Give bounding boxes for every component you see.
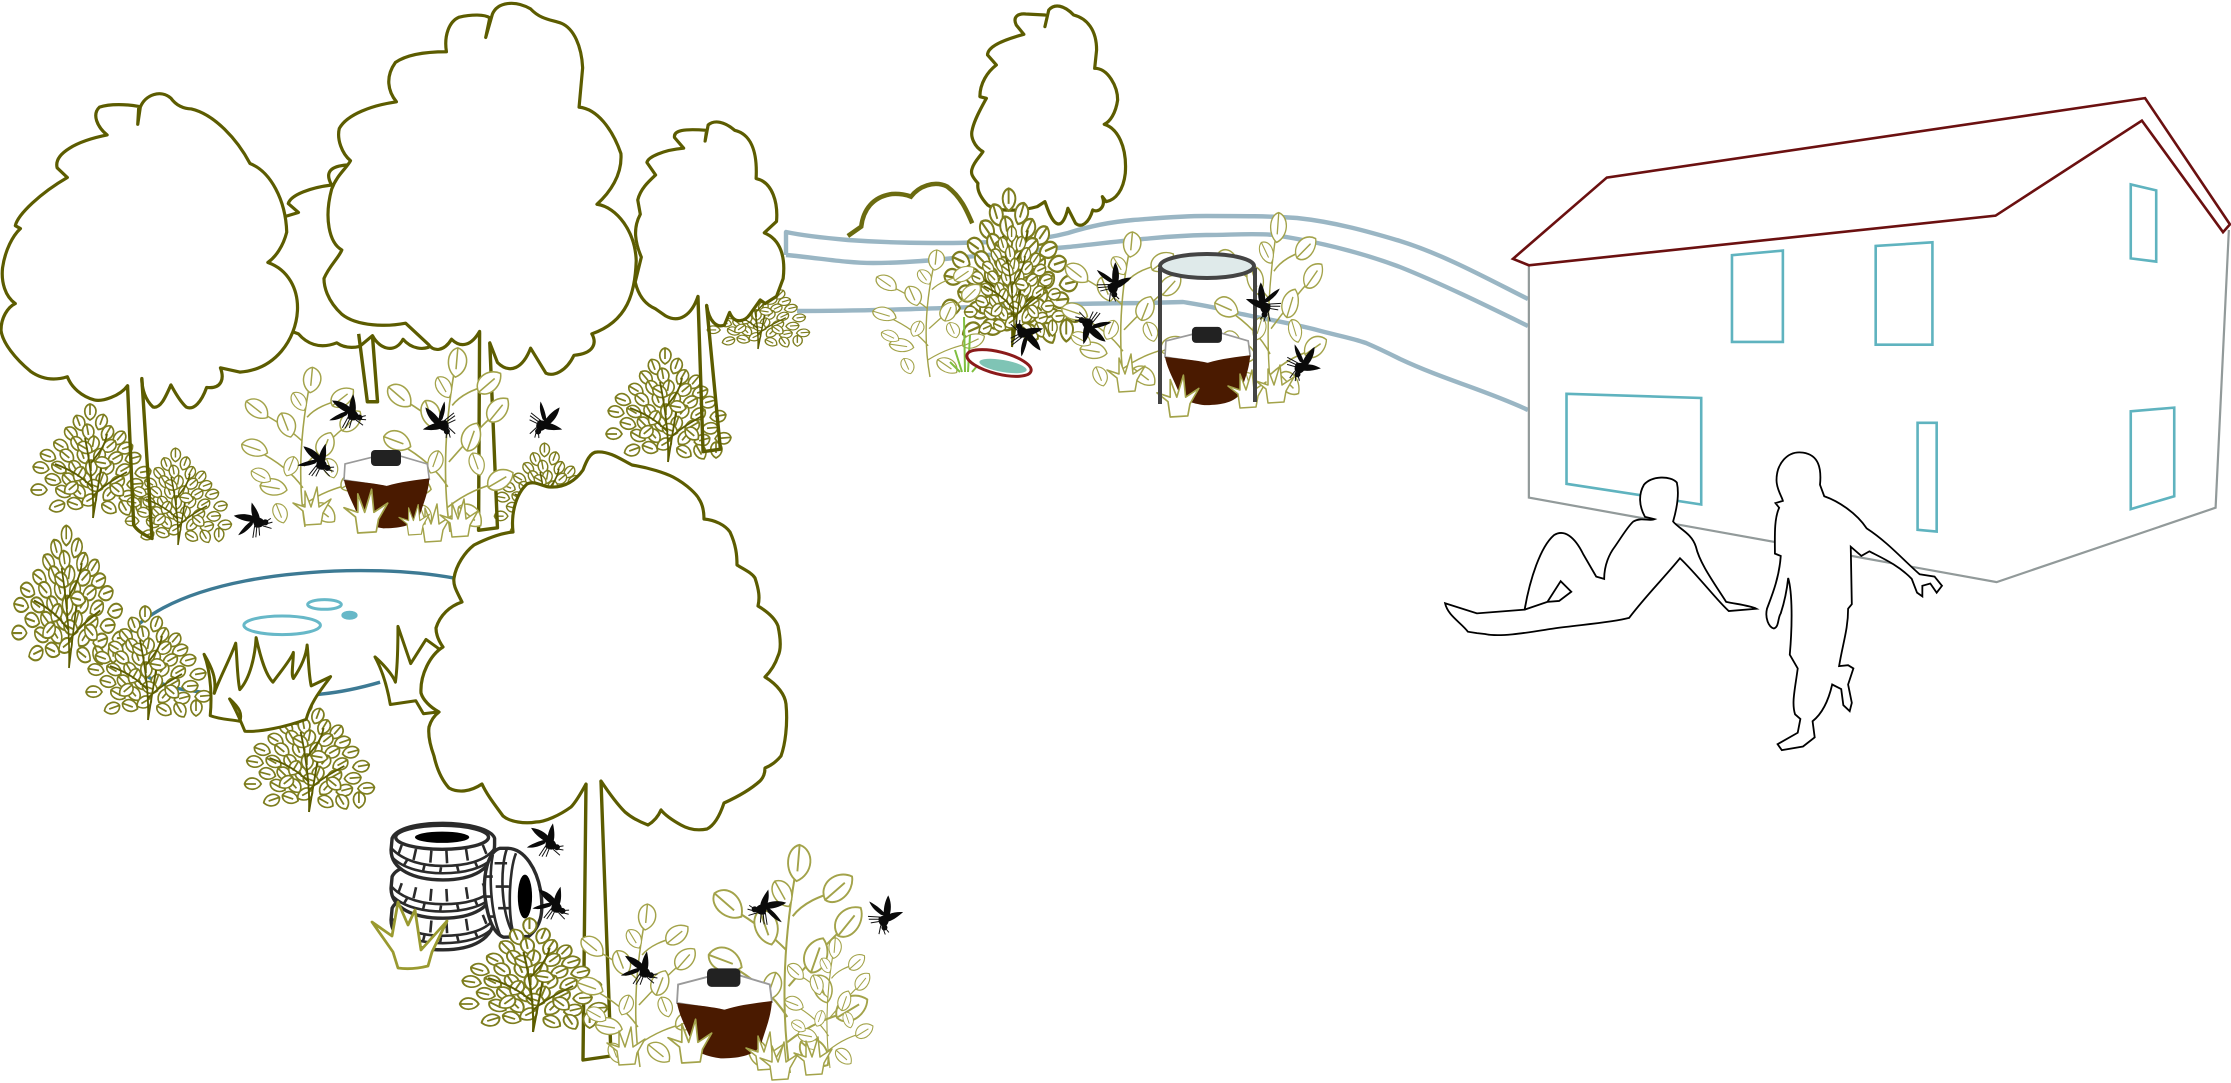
tree: right of centre: [635, 122, 784, 326]
covered jar: lower: [677, 968, 772, 1058]
person: seated figure: [1445, 478, 1756, 635]
plant: right of lower jar: [705, 844, 876, 1073]
plant: right of covered jar: [1212, 212, 1330, 400]
shrub: top middle dense: [942, 189, 1084, 347]
plant: beside covered jar: [1059, 231, 1189, 390]
tree trunks: upper group: [128, 296, 720, 539]
tufts around lower jar: [607, 1019, 832, 1080]
shrubs: upper left understorey: [31, 348, 731, 545]
plant: left of bowl: [870, 249, 988, 377]
grass by bowl: [950, 317, 978, 372]
water pipes running to the house: [786, 216, 1528, 410]
tire stack: [391, 823, 542, 950]
pond ripples: [244, 600, 356, 635]
grass tufts at pond edge: [204, 626, 439, 731]
grass tuft in front of tires: [372, 902, 447, 969]
shrub: behind right tree: [707, 271, 810, 349]
house walls: [1529, 230, 2229, 582]
pond: [121, 571, 454, 697]
tree: left large: [1, 94, 298, 408]
plant: left of lower jar: [575, 903, 703, 1067]
windows: [1567, 184, 2174, 532]
water bowl: [964, 344, 1034, 382]
mosquitoes: lower cluster: [525, 818, 907, 990]
tree: top middle: [971, 6, 1126, 225]
person: standing child: [1766, 452, 1942, 750]
distant bush hill outline: [848, 184, 972, 236]
house: [1513, 98, 2230, 582]
tree: behind centre: [245, 165, 459, 402]
plant: left of upper jar: [239, 367, 369, 527]
shrub: below tires: [460, 918, 608, 1032]
tree: tall centre: [324, 3, 636, 374]
shrubs: pond side: [12, 526, 375, 812]
tire rim and hole: [396, 825, 489, 849]
mosquitoes near house-side cluster: [1004, 259, 1324, 385]
tufts around upper jar: [293, 487, 478, 542]
covered jar under raised platform: [1165, 327, 1250, 405]
raised water tank stand: [1160, 254, 1255, 404]
mosquitoes: upper cluster: [232, 391, 569, 540]
leaning tire: [484, 848, 542, 937]
roof: [1513, 98, 2230, 265]
covered jar: upper: [344, 450, 429, 528]
tree: lower large foreground: [421, 452, 787, 1060]
tufts around raised jar: [1107, 354, 1294, 417]
plant: right of upper jar: [381, 347, 517, 532]
